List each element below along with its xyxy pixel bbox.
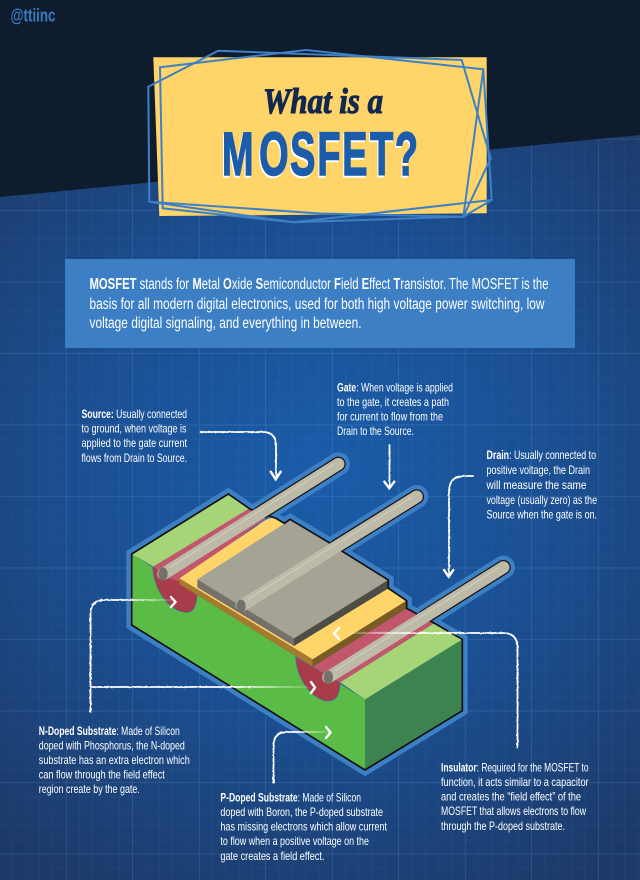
gate label: to the gate, it creates a path bbox=[337, 395, 449, 409]
pink strip right bbox=[313, 608, 435, 682]
substrate top left bbox=[132, 494, 250, 567]
title block bbox=[148, 50, 492, 222]
gate label: Drain to the Source. bbox=[337, 424, 414, 438]
P-doped substrate label bbox=[220, 791, 387, 863]
source rod bbox=[158, 464, 338, 581]
arrow: gate bbox=[384, 445, 394, 488]
P-doped substrate label: P-Doped Substrate: Made of Silicon bbox=[220, 791, 361, 805]
P-doped substrate label: to flow when a positive voltage on the bbox=[220, 834, 369, 848]
arrow: drain bbox=[444, 476, 473, 577]
title line one: What is a bbox=[263, 81, 383, 121]
intro text: voltage digital signaling, and everything in between. bbox=[90, 315, 362, 332]
N-doped well right bbox=[296, 657, 340, 701]
title panel bbox=[153, 57, 487, 216]
source label: applied to the gate current bbox=[82, 436, 187, 450]
N-doped substrate label: substrate has an extra electron which bbox=[39, 753, 190, 767]
source label: Source: Usually connected bbox=[82, 407, 187, 421]
rod outlines bbox=[260, 464, 503, 617]
device outline bbox=[132, 494, 462, 770]
brand handle: @ttiinc bbox=[10, 6, 56, 26]
intro text bbox=[90, 276, 548, 332]
N-doped well left bbox=[153, 567, 197, 612]
N-doped substrate label bbox=[39, 724, 190, 796]
intro text: MOSFET stands for Metal Oxide Semiconductor Field Effect Transistor. The MOSFET is the bbox=[90, 276, 548, 293]
arrow: insulator bbox=[334, 628, 518, 748]
source label bbox=[82, 407, 187, 465]
insulator label: through the P-doped substrate. bbox=[441, 819, 565, 833]
P-doped substrate label: gate creates a field effect. bbox=[220, 849, 324, 863]
N-doped substrate label: doped with Phosphorus, the N-doped bbox=[39, 739, 185, 753]
gate rod bbox=[236, 497, 417, 613]
gate plate bbox=[197, 520, 388, 646]
insulator label: MOSFET that allows electrons to flow bbox=[441, 804, 586, 818]
gate label: for current to flow from the bbox=[337, 410, 443, 424]
N-doped substrate label: region create by the gate. bbox=[39, 782, 140, 796]
insulator label: and creates the “field effect” of the bbox=[441, 790, 581, 804]
drain label: Source when the gate is on. bbox=[486, 508, 597, 522]
insulator label bbox=[441, 761, 589, 833]
insulator label: function, it acts similar to a capacitor bbox=[441, 775, 589, 789]
substrate top right bbox=[340, 623, 462, 699]
P-doped substrate label: doped with Boron, the P-doped substrate bbox=[220, 805, 383, 819]
P-doped substrate label: has missing electrons which allow current bbox=[220, 820, 387, 834]
arrow: source bbox=[200, 432, 281, 479]
title frame lines bbox=[148, 50, 492, 222]
pink strip left bbox=[153, 508, 266, 582]
title line two: MOSFET? bbox=[222, 120, 418, 188]
MOSFET diagram bbox=[132, 464, 503, 770]
drain label: will measure the same bbox=[486, 478, 587, 492]
substrate right face bbox=[365, 639, 462, 770]
drain label: positive voltage, the Drain bbox=[486, 463, 590, 477]
drain label: voltage (usually zero) as the bbox=[486, 493, 597, 507]
insulator bbox=[179, 517, 407, 667]
drain label: Drain: Usually connected to bbox=[486, 448, 596, 462]
insulator label: Insulator: Required for the MOSFET to bbox=[441, 761, 589, 775]
gate label bbox=[337, 381, 453, 438]
title line two: MOSFET? bbox=[221, 122, 417, 190]
blue halo bbox=[132, 464, 503, 770]
arrow: N-doped bbox=[90, 597, 315, 712]
intro panel bbox=[65, 259, 575, 348]
N-doped substrate label: can flow through the field effect bbox=[39, 768, 165, 782]
N-doped substrate label: N-Doped Substrate: Made of Silicon bbox=[39, 724, 180, 738]
source label: to ground, when voltage is bbox=[82, 422, 186, 436]
arrow: P-doped bbox=[274, 727, 330, 783]
drain label bbox=[486, 448, 597, 522]
gate label: Gate: When voltage is applied bbox=[337, 381, 453, 395]
source label: flows from Drain to Source. bbox=[82, 451, 187, 465]
drain rod bbox=[324, 567, 503, 684]
substrate front face bbox=[132, 554, 365, 770]
